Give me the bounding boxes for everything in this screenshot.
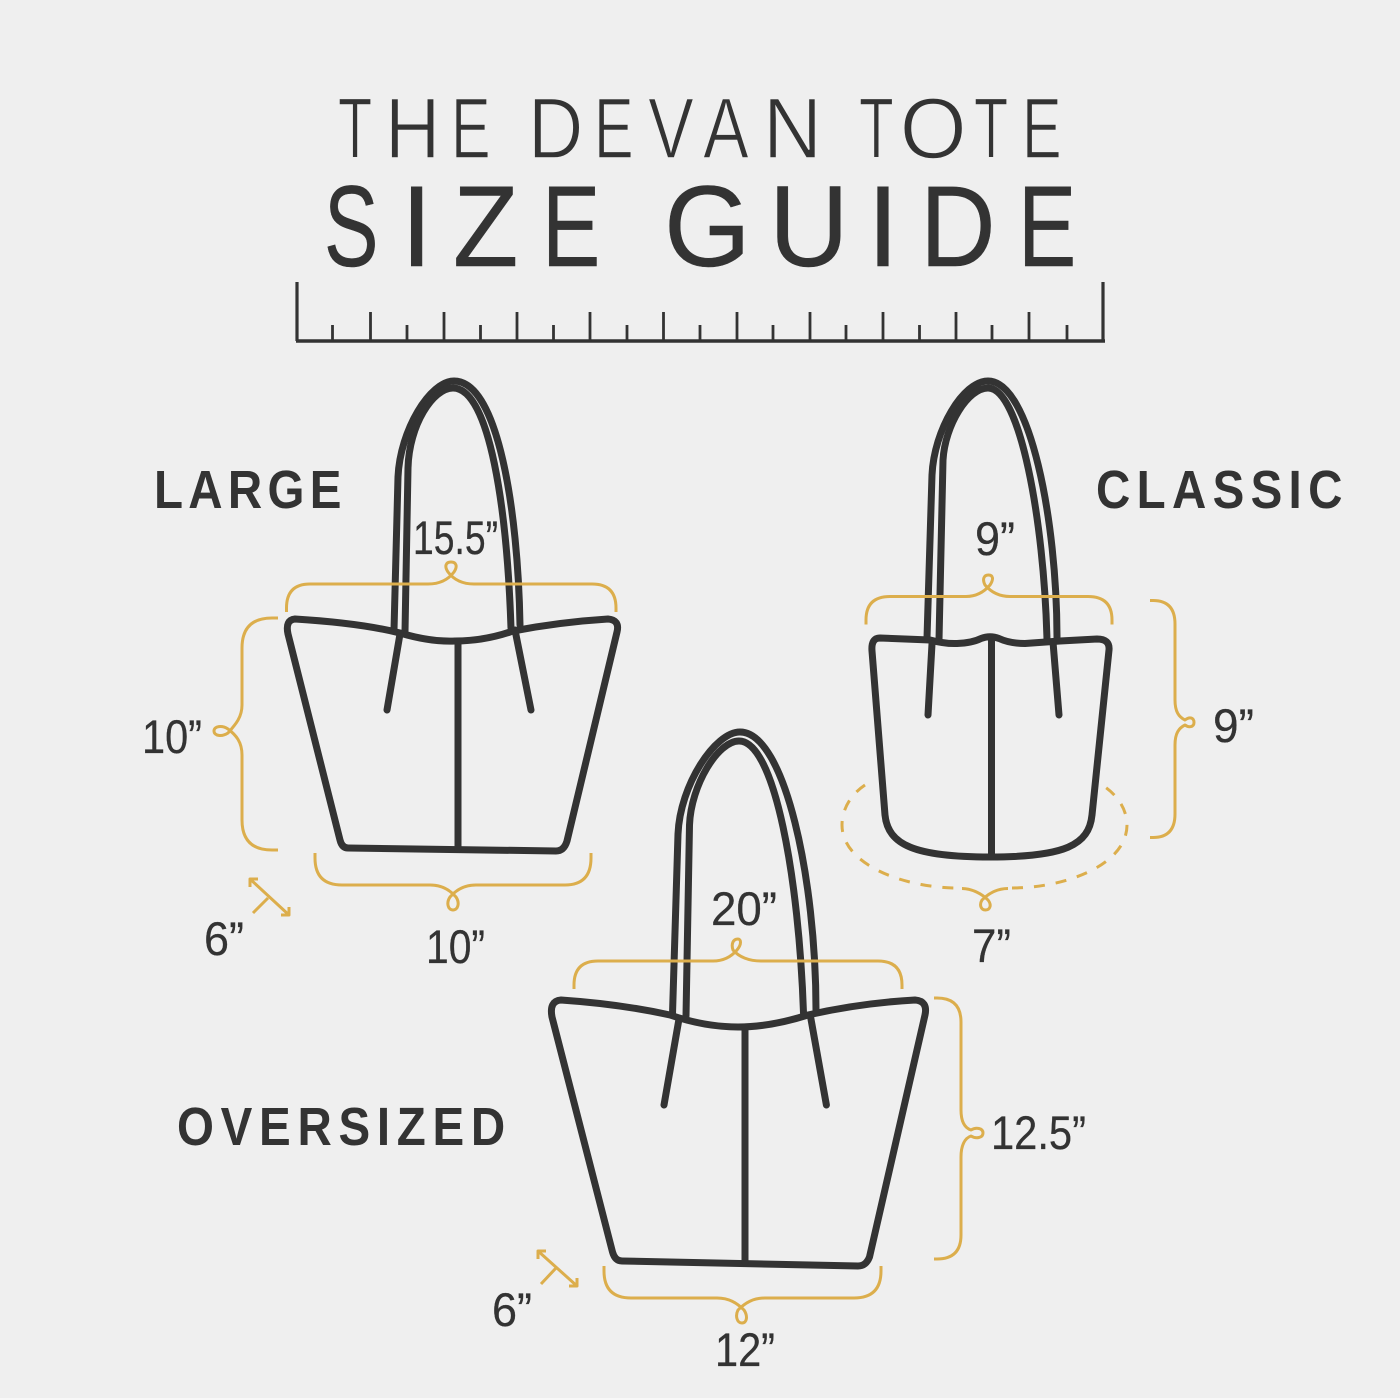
brace: large top width (286, 562, 616, 612)
heading: size guide (324, 163, 1076, 291)
brace: oversized top width (574, 939, 902, 989)
panel: classic tote (842, 381, 1342, 972)
measure: 7 base: 7” (972, 919, 1011, 972)
heading: size guide: D (920, 163, 995, 291)
brace: oversized bottom width (604, 1266, 881, 1323)
measure: 6 depth: 6” (204, 912, 244, 965)
heading: size guide: E (1018, 163, 1076, 291)
ruler (296, 282, 1105, 341)
heading: size guide: I (401, 163, 433, 291)
brace: oversized height (934, 998, 983, 1259)
measure: 9 top: 9” (975, 512, 1015, 565)
arrow: oversized depth (538, 1251, 577, 1286)
title: the devan tote: N (762, 81, 822, 177)
label: large: LARGE (154, 459, 341, 520)
brace: classic top width (866, 575, 1112, 624)
label: classic: CLASSIC (1096, 459, 1342, 520)
bag: large (287, 381, 618, 851)
brace: large height (214, 618, 278, 850)
measure: 10 width: 10” (426, 920, 485, 973)
bag: oversized (551, 732, 926, 1266)
title: the devan tote: A (703, 81, 749, 177)
measure: 12 width: 12” (715, 1323, 775, 1376)
bag: classic (872, 381, 1109, 857)
title: the devan tote: T (974, 81, 1008, 177)
heading: size guide: I (867, 163, 899, 291)
measure: 12.5 height: 12.5” (991, 1106, 1086, 1159)
title: the devan tote: V (648, 81, 694, 177)
heading: size guide: G (664, 163, 751, 291)
title: the devan tote: E (594, 81, 634, 177)
label: oversized: OVERSIZED (177, 1096, 505, 1157)
title: the devan tote: O (900, 81, 967, 177)
measure: 9 height: 9” (1213, 699, 1254, 752)
panel: large tote (142, 381, 618, 973)
brace: classic base loop (962, 888, 1008, 910)
title: the devan tote: H (385, 81, 440, 177)
title: the devan tote: T (858, 81, 893, 177)
heading: size guide: S (324, 163, 379, 291)
measure: 20: 20” (711, 882, 777, 935)
panel: oversized tote (177, 732, 1086, 1376)
heading: size guide: Z (453, 163, 518, 291)
measure: 10 height: 10” (142, 710, 202, 763)
measure: 6 depth: 6” (492, 1283, 532, 1336)
title: the devan tote: E (1022, 81, 1062, 177)
brace: classic height (1150, 600, 1194, 838)
brace: classic base dashed (842, 785, 1127, 888)
title: the devan tote: T (338, 81, 372, 177)
measure: 15.5: 15.5” (413, 511, 498, 564)
brace: large bottom width (315, 853, 591, 910)
title: the devan tote: E (451, 81, 491, 177)
arrow: large depth (250, 879, 289, 915)
title: the devan tote: D (528, 81, 583, 177)
heading: size guide: E (542, 163, 600, 291)
heading: size guide: U (769, 163, 849, 291)
title: the devan tote (338, 81, 1062, 177)
